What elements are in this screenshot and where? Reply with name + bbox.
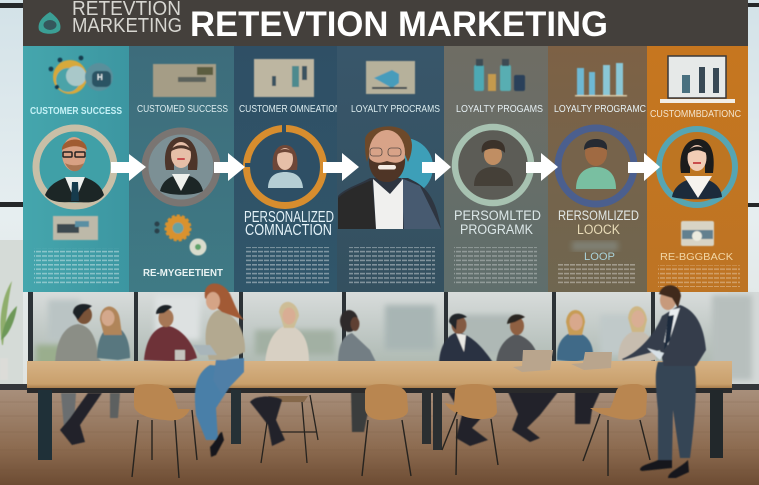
body text lines (454, 247, 537, 284)
body text lines (34, 248, 119, 284)
heading: COMNACTION (245, 222, 332, 239)
icon: bar chart (575, 63, 627, 96)
label: LOYALTY PROGRAMC (554, 104, 646, 115)
laptop 1 (513, 350, 553, 372)
chair 5 (583, 384, 650, 476)
main title: RETEVTION MARKETING (190, 5, 608, 44)
chairs behind table (261, 395, 318, 463)
label: CUSTOMMBDATIONC (650, 109, 741, 120)
arrow 2 (214, 153, 245, 181)
panel: column 1 customer success (23, 46, 129, 292)
panel: column 2 customer success (129, 46, 234, 292)
chair 1 (132, 384, 197, 478)
person: blonde woman in white blouse (618, 306, 656, 364)
person: blonde woman in blue (557, 310, 593, 362)
conference table (27, 361, 732, 460)
logo icon (39, 12, 60, 34)
person: blonde woman (97, 306, 130, 360)
portrait: bearded man (338, 126, 441, 229)
chair behind the seated blonde woman (261, 395, 318, 463)
image card (254, 59, 314, 97)
panel: column 5 loyalty programs (444, 46, 548, 292)
label: RE-MYGEETIENT (143, 267, 224, 279)
avatar: man with glasses (36, 128, 114, 206)
plant (0, 281, 17, 380)
person: man in dark suit (439, 314, 494, 371)
arrow 5 (526, 153, 558, 181)
people seated behind the table (55, 302, 656, 371)
image card (153, 64, 216, 97)
chair 3 (362, 384, 411, 476)
arrow 4 (422, 153, 451, 181)
presenter in a suit (622, 285, 706, 478)
chair 4 (442, 384, 498, 475)
presentation board (23, 0, 748, 292)
avatar: woman with dark hair (145, 131, 217, 203)
icon: bottles (474, 59, 525, 91)
heading (244, 209, 334, 239)
heading: RERSOMLIZED (558, 208, 639, 223)
label: LOYALTY PROCRAMS (351, 104, 440, 115)
body text lines (349, 247, 435, 284)
person: man in maroon sweater (144, 305, 197, 362)
label: CUSTOMER OMNEATION (239, 104, 341, 115)
label: CUSTOMER SUCCESS (30, 105, 122, 117)
label: RE-BGGBACK (660, 251, 733, 263)
wooden floor (0, 390, 759, 485)
woman sitting on the table with tablet (193, 284, 245, 457)
arrow 1 (111, 154, 146, 181)
arrows between steps (111, 153, 660, 181)
chairs in front of the table (132, 384, 650, 478)
avatar: woman with long hair (659, 129, 735, 205)
avatar: woman in ring (245, 124, 324, 206)
person: man in grey sweater (55, 304, 108, 368)
icon: colourful cluster (49, 56, 113, 94)
panel: column 7 customer re-engagement (647, 46, 748, 292)
body text lines (245, 247, 329, 284)
panel: column 6 loyalty program (548, 46, 647, 292)
icon: card (681, 221, 714, 246)
body text lines (558, 264, 636, 286)
legs of seated people (60, 392, 600, 446)
icon: colourful cluster: H (97, 73, 103, 82)
body text lines (658, 265, 740, 287)
label: LOYALTY PROGAMS (456, 104, 543, 115)
header bar (23, 0, 748, 46)
heading (558, 208, 639, 237)
logo text: MARKETING (72, 15, 182, 37)
icon: gear and badge (154, 216, 206, 256)
image card (366, 61, 415, 94)
label: CUSTOMED SUCCESS (137, 104, 228, 115)
laptops on the table (513, 350, 612, 372)
heading: LOOCK (577, 222, 620, 237)
panel: column 4 loyalty programs (337, 46, 444, 292)
person: seated blonde woman (265, 302, 309, 365)
image card (53, 216, 98, 240)
loop label: LOOP (584, 251, 615, 263)
logo text (72, 0, 182, 37)
person: woman in grey jacket (338, 310, 376, 363)
icon: laptop chart (660, 56, 735, 103)
loop label (572, 241, 618, 263)
panel: column 3 customer omnication (234, 46, 341, 292)
person: man in grey blazer (496, 314, 538, 365)
heading: PERSOMLTED (454, 208, 541, 223)
arrow 3 (323, 153, 359, 181)
arrow 6 (628, 153, 660, 181)
heading (454, 208, 541, 237)
laptop 2 (571, 352, 612, 370)
heading: PROGRAMK (460, 222, 533, 237)
avatar: person in green shirt (558, 128, 634, 204)
heading: PERSONALIZED (244, 209, 334, 226)
avatar: neutral person (455, 127, 531, 203)
